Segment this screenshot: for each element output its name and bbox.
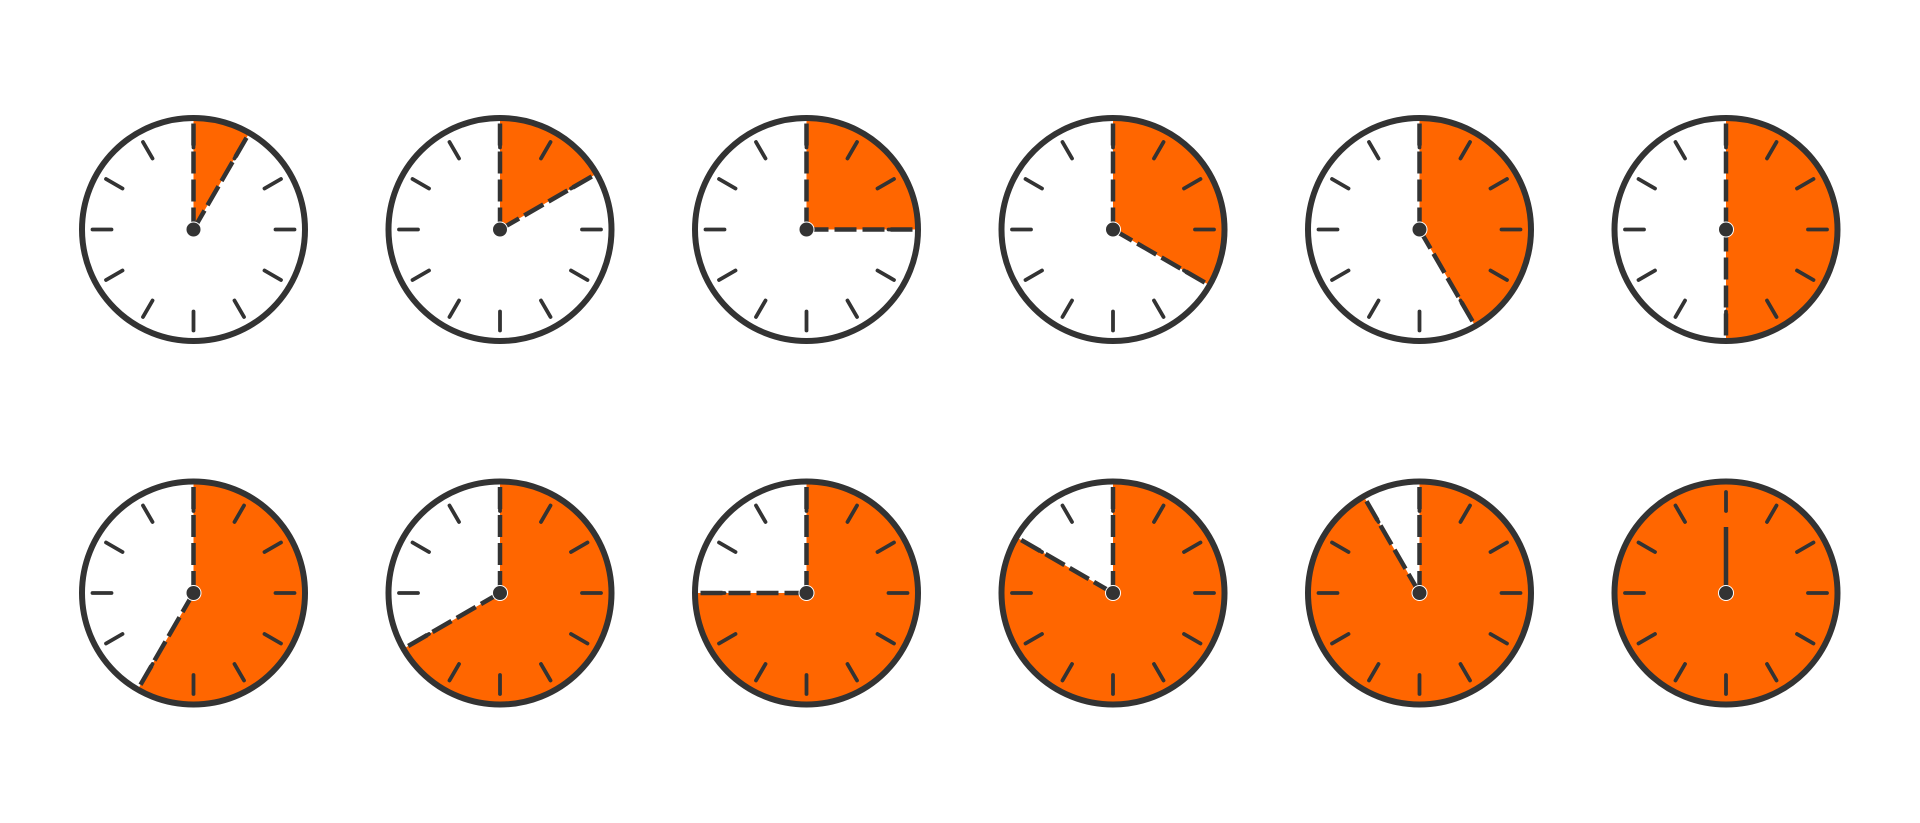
clock 12: 60 min [1614,482,1838,704]
clock 10: 50 min [1002,482,1224,704]
clock 2: 10 min [388,118,612,341]
clock 11: 55 min [1308,482,1531,704]
clock 1: 5 min [82,118,305,341]
clock 6: 30 min [1614,118,1838,341]
clock 4: 20 min [1002,118,1224,341]
clock 8: 40 min [388,482,612,704]
clock 7: 35 min [82,482,305,704]
clock 3: 15 min [695,118,918,341]
clock 9: 45 min [695,482,918,704]
clock 5: 25 min [1308,118,1531,341]
